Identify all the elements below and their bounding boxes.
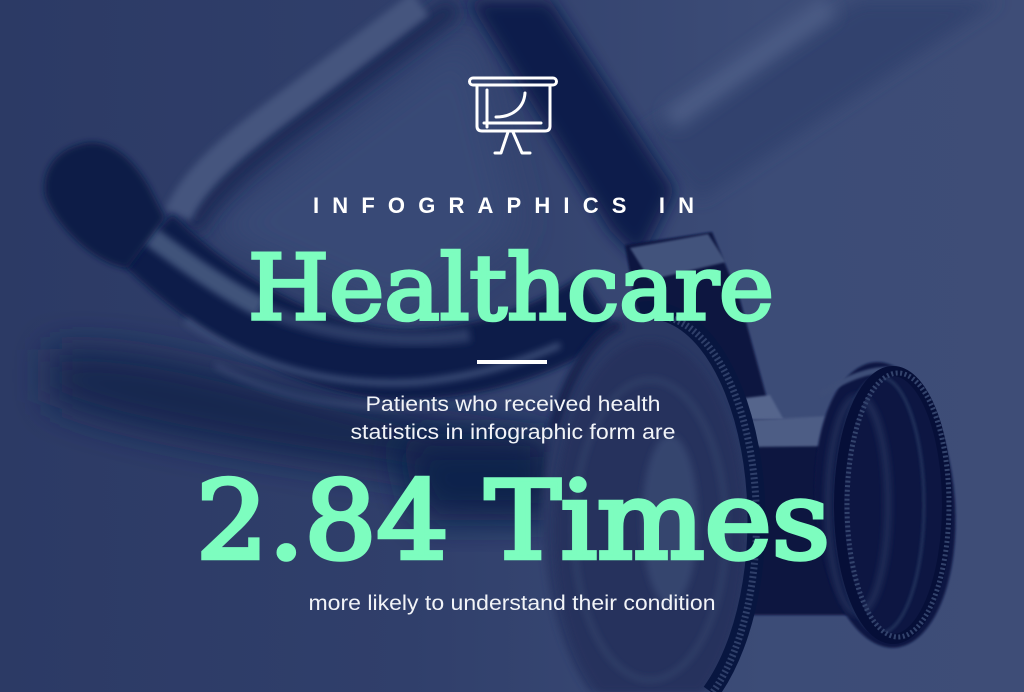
chestpiece large disc [543,309,757,692]
intro text [350,393,676,444]
intro text: Patients who received health [366,393,660,416]
icon: presentation board with chart [470,78,556,153]
divider [477,360,547,364]
statistic: 2.84 Times: 2.84 Times [196,459,830,584]
eyebrow heading: INFOGRAPHICS IN [313,193,694,218]
closing text: more likely to understand their condition [308,592,716,615]
intro text: statistics in infographic form are [350,421,676,444]
stethoscope earpiece [45,142,165,268]
stethoscope ear tube [145,0,1000,407]
chestpiece stem [625,232,860,615]
stethoscope main tube [468,0,675,260]
title: Healthcare: Healthcare [248,236,774,341]
chestpiece small head [805,357,965,653]
